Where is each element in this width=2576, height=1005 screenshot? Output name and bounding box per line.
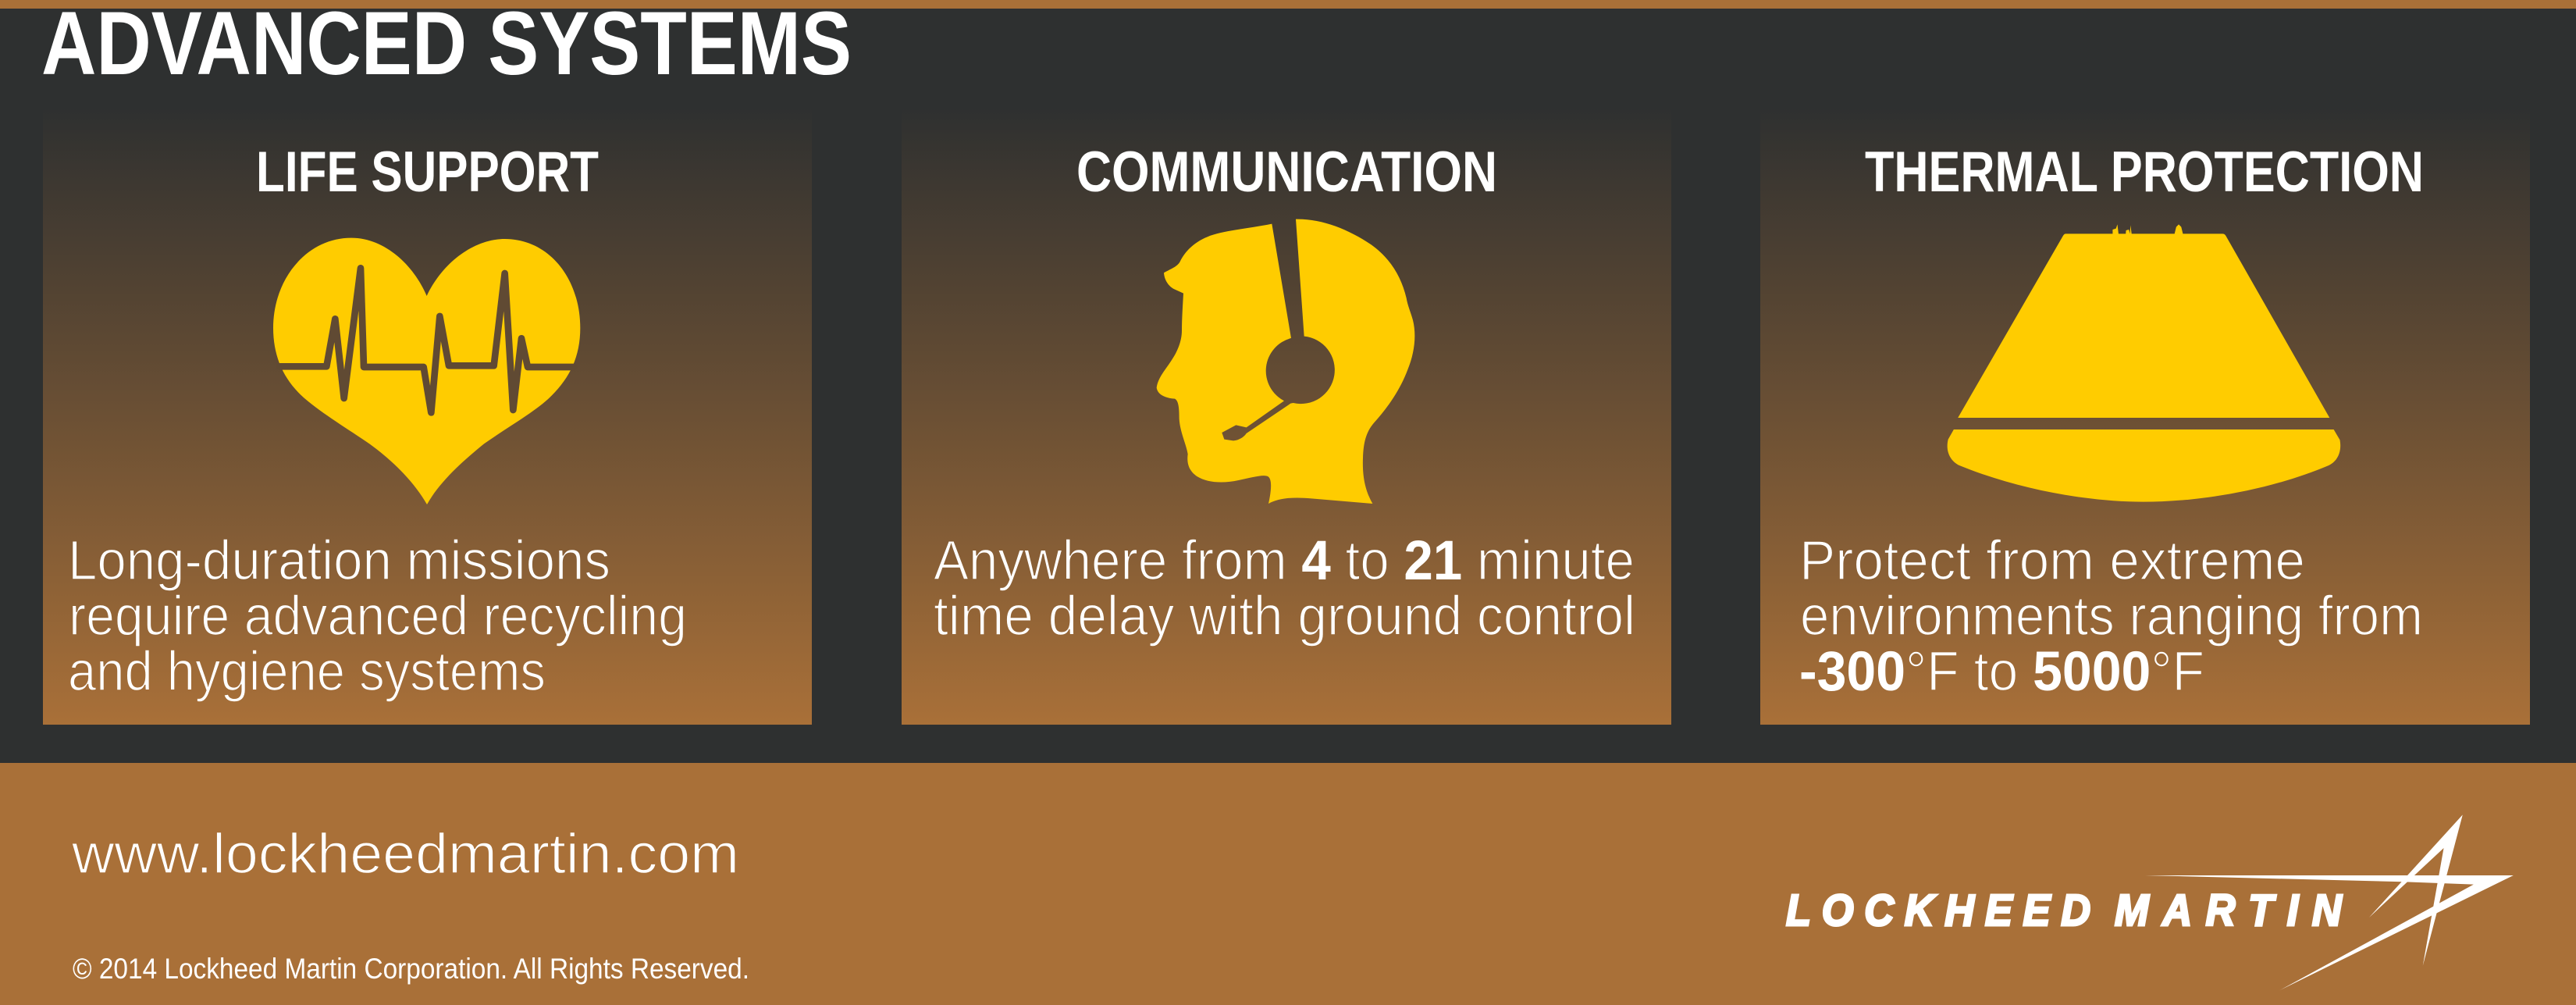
logo: lockheed martin wordmark — [1786, 885, 2343, 935]
body text: thermal protection — [1799, 530, 2423, 703]
panel background — [43, 107, 812, 725]
body text: thermal protection: -300°F to 5000°F — [1799, 641, 2204, 703]
heading: communication: COMMUNICATION — [1076, 141, 1497, 204]
panel background — [1760, 107, 2530, 725]
icon: heart with heartbeat line — [273, 238, 580, 504]
logo: star — [2145, 814, 2514, 990]
body text: life support: and hygiene systems — [68, 641, 546, 703]
body text: communication: Anywhere from 4 to 21 minute — [934, 530, 1635, 592]
body text: life support — [68, 530, 687, 703]
body text: thermal protection: Protect from extreme — [1799, 530, 2305, 592]
footer band — [0, 763, 2576, 1005]
logo: lockheed martin wordmark: MARTIN — [2115, 885, 2343, 935]
body text: thermal protection: environments ranging from — [1800, 586, 2423, 647]
body text: life support: require advanced recycling — [69, 586, 687, 647]
body text: communication: time delay with ground control — [934, 586, 1635, 647]
panel: thermal protection — [1760, 107, 2530, 725]
heading: thermal protection: THERMAL PROTECTION — [1865, 141, 2424, 204]
panel background — [902, 107, 1671, 725]
website url: www.lockheedmartin.com — [71, 823, 739, 886]
panel: communication — [902, 107, 1671, 725]
panel: life support — [43, 107, 812, 725]
heading: life support: LIFE SUPPORT — [256, 141, 599, 204]
body text: communication — [934, 530, 1635, 647]
icon: space capsule with heat shield — [1948, 224, 2340, 502]
copyright: © 2014 Lockheed Martin Corporation. All Rights Reserved. — [73, 953, 749, 985]
icon: head with headset — [1157, 219, 1414, 504]
body text: life support: Long-duration missions — [68, 530, 610, 592]
logo: lockheed martin wordmark: LOCKHEED — [1786, 885, 2090, 935]
